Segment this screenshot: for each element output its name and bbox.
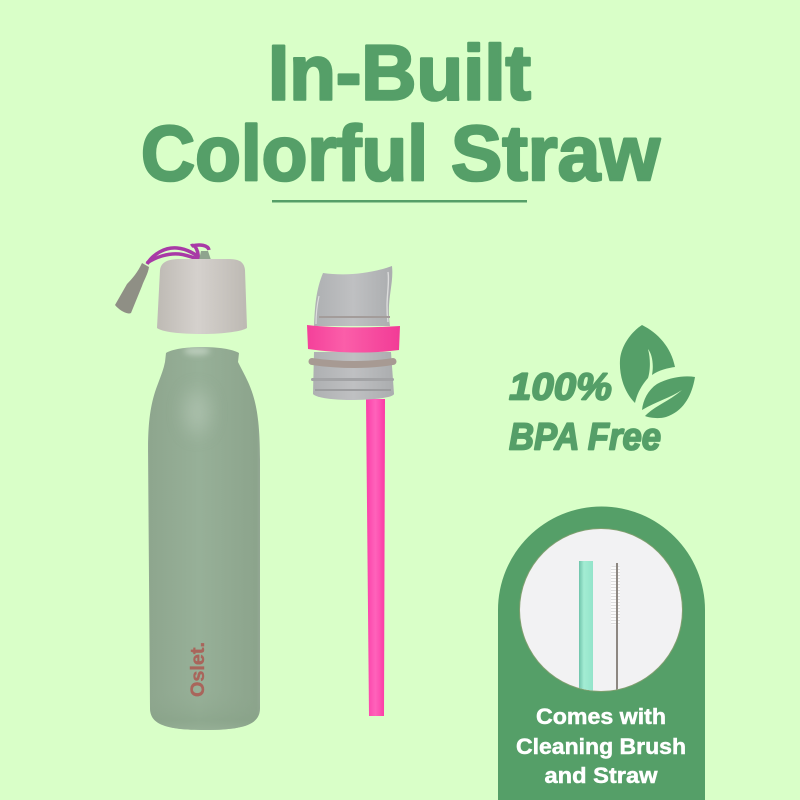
panel caption: Comes with (536, 704, 666, 729)
icon: bottle body (145, 340, 265, 735)
o-ring (308, 358, 397, 368)
infographic canvas (115, 42, 705, 800)
threaded neck (313, 352, 394, 400)
badge: 100% BPA Free (509, 325, 695, 458)
title underline (272, 200, 527, 202)
title (141, 28, 660, 197)
icon: leaves (620, 325, 695, 418)
icon: bottle lid with cord (115, 245, 247, 334)
title: Colorful (141, 109, 428, 197)
pink band (307, 325, 400, 353)
grey mouthpiece (314, 266, 392, 326)
panel caption: Cleaning Brush (516, 734, 686, 759)
photo: straw and cleaning brush (519, 528, 683, 698)
panel caption (516, 704, 686, 788)
badge text: BPA Free (509, 416, 661, 458)
icon: straw lid assembly (307, 266, 400, 716)
badge text: 100% (509, 366, 612, 408)
panel caption: and Straw (544, 763, 658, 788)
brand text: Oslet. (188, 642, 209, 697)
panel: accessories arch (498, 506, 705, 800)
pink straw (366, 399, 385, 716)
badge text (509, 366, 661, 458)
title: In-Built (268, 28, 531, 116)
title: Straw (451, 109, 660, 197)
